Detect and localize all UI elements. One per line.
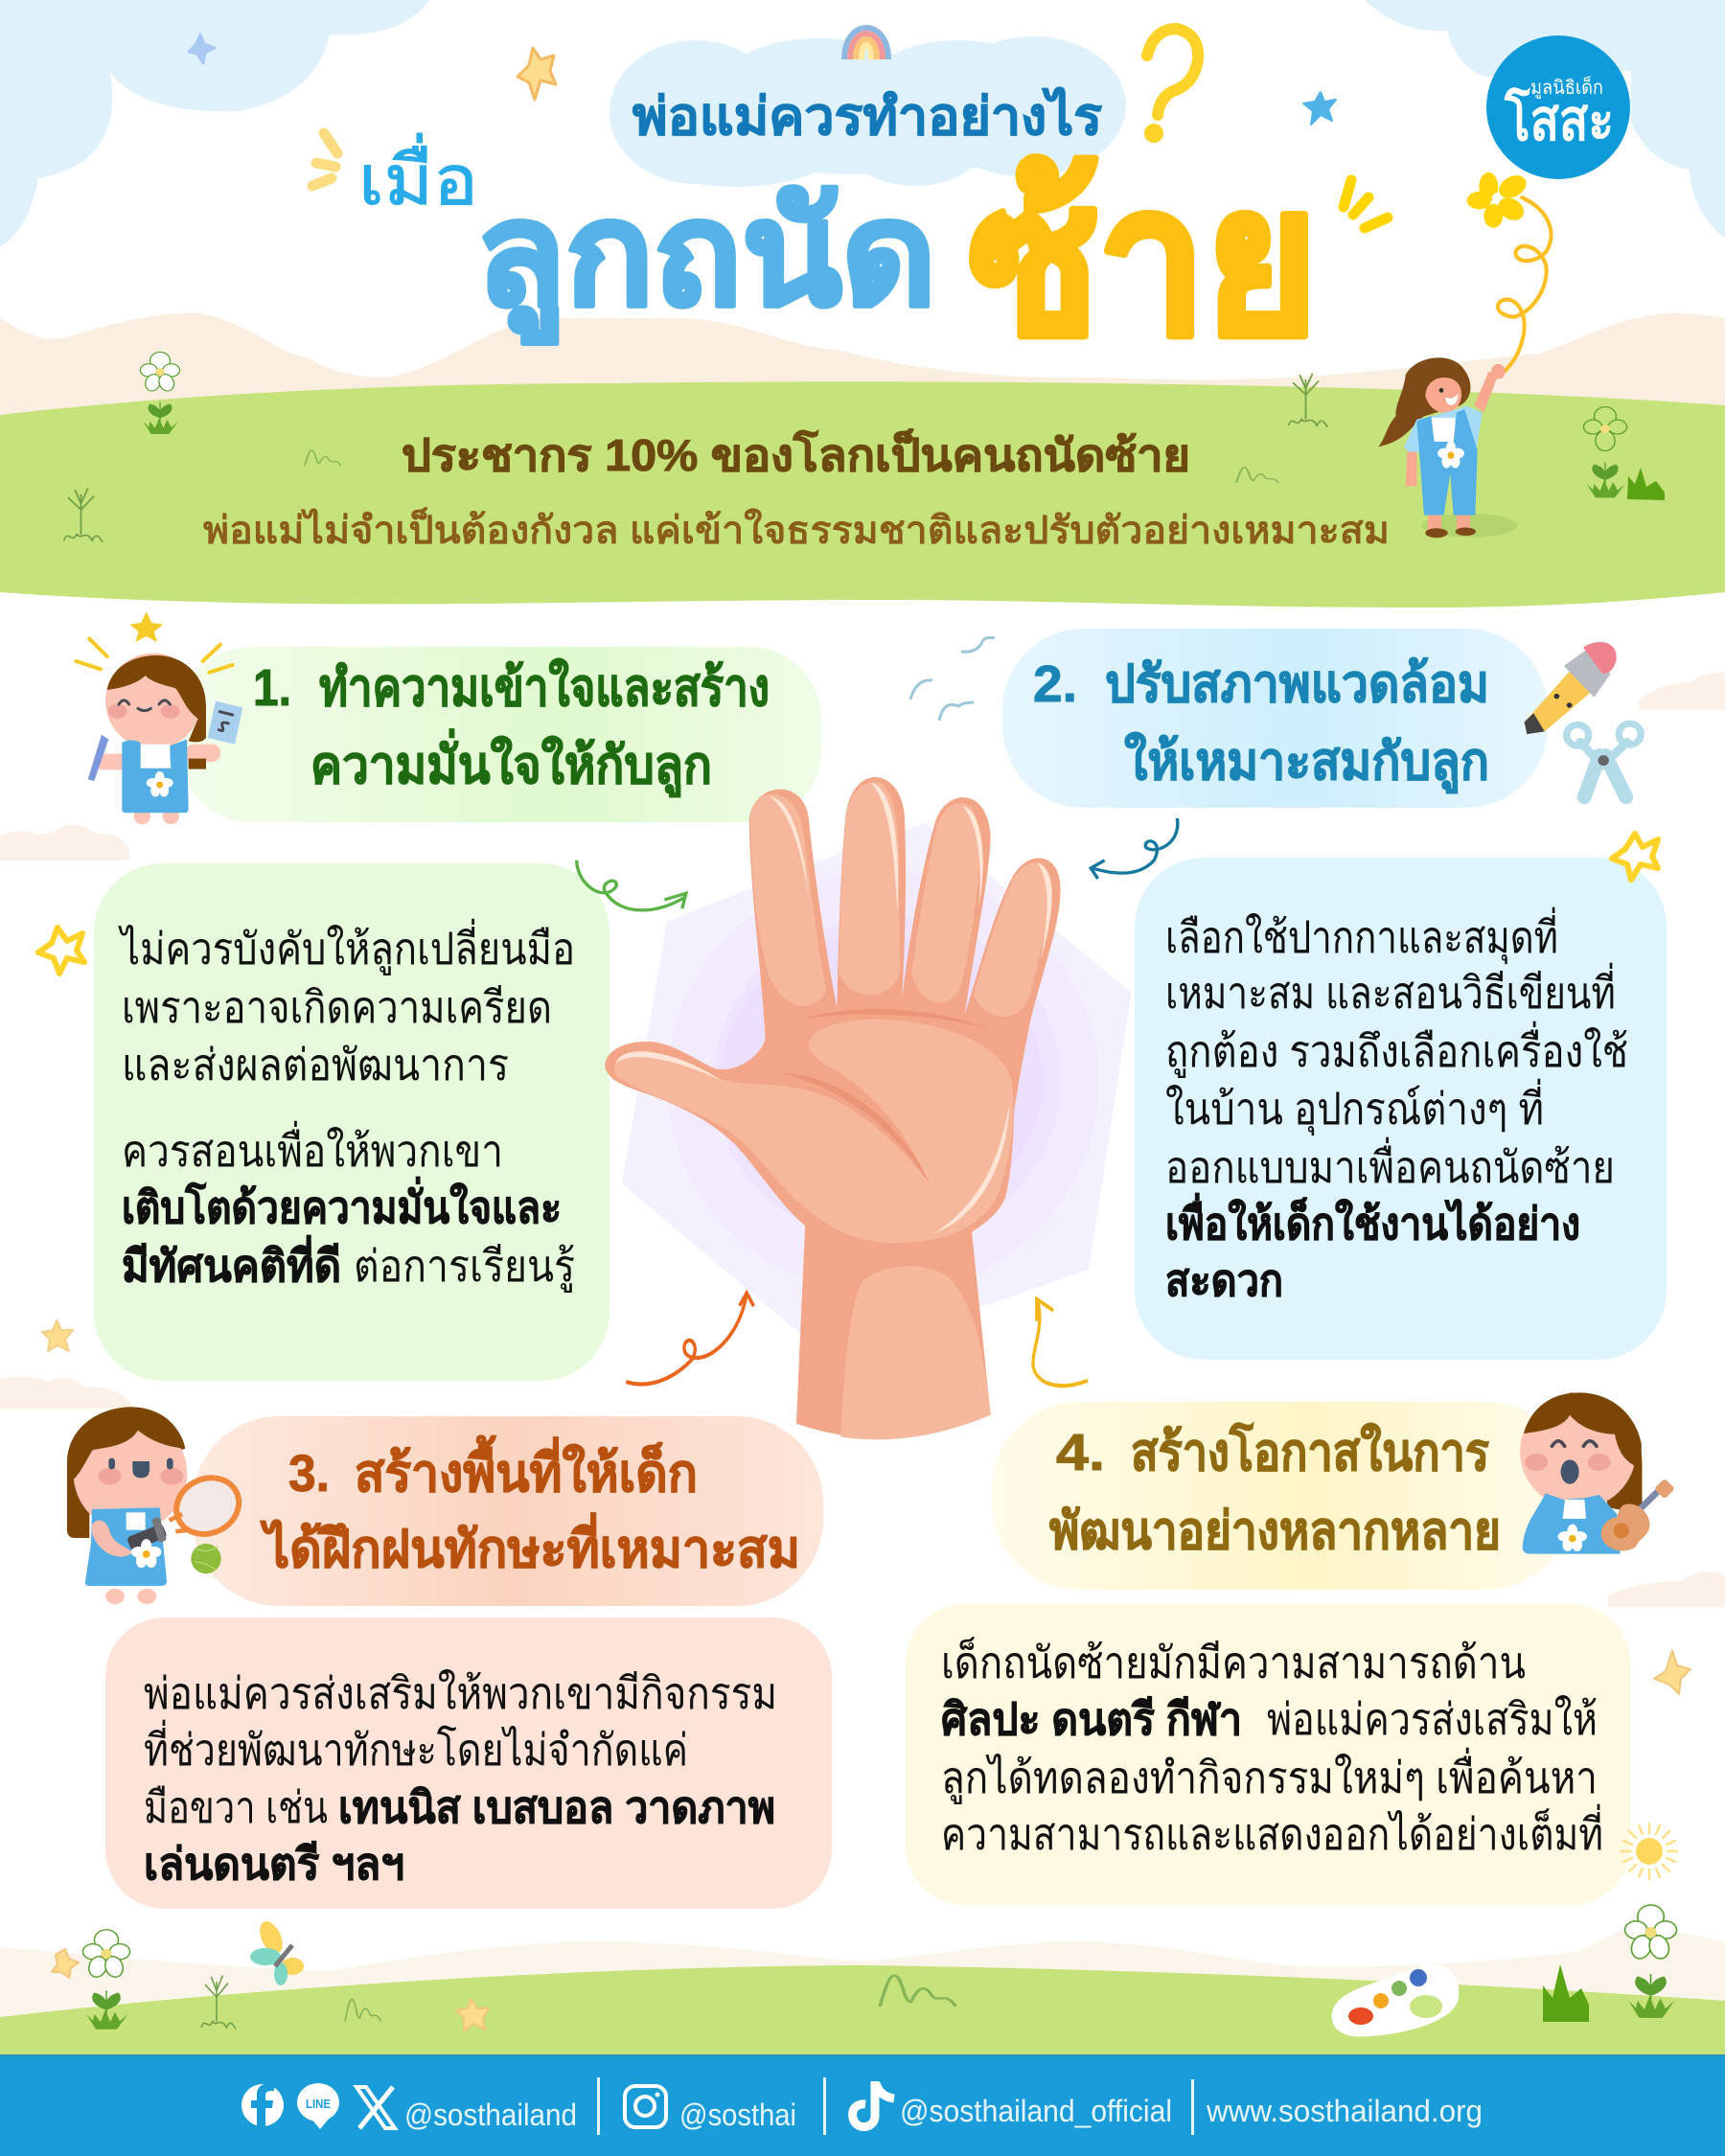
body text 3: เล่นดนตรี ฯลฯ — [144, 1839, 404, 1889]
body card 3 — [105, 1617, 832, 1909]
flower top right — [1583, 407, 1627, 497]
panel 3: practice space — [105, 1416, 832, 1909]
body card 2 — [1135, 858, 1667, 1360]
body text 2: เลือกใช้ปากกาและสมุดที่ — [1165, 906, 1558, 965]
heading text 4: 4. — [1056, 1424, 1105, 1481]
body text 1: ควรสอนเพื่อให้พวกเขา — [122, 1120, 503, 1176]
heading text 1: 1. — [253, 659, 291, 717]
body text 2: เพื่อให้เด็กใช้งานได้อย่าง — [1165, 1193, 1580, 1249]
body text 1: ไม่ควรบังคับให้ลูกเปลี่ยนมือ — [118, 918, 575, 975]
icon: instagram — [625, 2086, 666, 2127]
kite girl illustration — [1378, 171, 1552, 538]
body text 1: เพราะอาจเกิดความเครียด — [122, 982, 552, 1032]
heading text 4: สร้างโอกาสในการ — [1131, 1422, 1489, 1481]
body text 2: ออกแบบมาเพื่อคนถนัดซ้าย — [1165, 1136, 1615, 1192]
heading text 2: ปรับสภาพแวดล้อม — [1105, 655, 1489, 713]
heading text 4: พัฒนาอย่างหลากหลาย — [1049, 1502, 1501, 1560]
panel 2: environment — [1002, 629, 1667, 1360]
sprig bottom — [201, 1976, 236, 2030]
logo: โสสะ — [1504, 86, 1614, 152]
bottom plants — [82, 1905, 1676, 2030]
icon: question mark — [1147, 29, 1198, 137]
heading text 1: ทำความเข้าใจและสร้าง — [319, 657, 770, 717]
body text 1: และส่งผลต่อพัฒนาการ — [122, 1040, 509, 1089]
yellow flower kite — [1467, 171, 1530, 228]
sparks left of title — [312, 133, 337, 186]
icon: line — [297, 2083, 339, 2129]
icon: paint palette — [1332, 1964, 1459, 2036]
icon: tiktok — [853, 2081, 894, 2127]
top left cloud — [0, 0, 429, 247]
ground shadow — [1421, 514, 1517, 538]
icon: birds — [910, 637, 995, 721]
icon: line: LINE — [306, 2097, 331, 2111]
summary text line 2: พ่อแม่ไม่จำเป็นต้องกังวล แค่เข้าใจธรรมชาติและปรับตัวอย่างเหมาะสม — [203, 506, 1390, 552]
icon: sun — [1622, 1823, 1677, 1879]
heading text 2 — [1033, 655, 1489, 793]
heading pill 2 — [1002, 629, 1548, 808]
star: pale blue top left — [189, 34, 215, 63]
title: left: ซ้าย — [969, 146, 1318, 377]
panel 1: understanding — [94, 647, 821, 1381]
icon: facebook — [242, 2083, 284, 2126]
heading text 3: 3. — [288, 1445, 330, 1502]
footer bar — [0, 2054, 1725, 2156]
grass scribbles — [305, 450, 340, 466]
title: child favours: ลูกถนัด — [476, 173, 936, 344]
handle: sosthai: @sosthai — [679, 2098, 796, 2132]
flower top left — [140, 352, 180, 434]
grass bottom right — [1543, 1964, 1589, 2022]
heading text 3: สร้างพื้นที่ให้เด็ก — [355, 1435, 698, 1502]
tan hills — [0, 313, 1725, 450]
body text 4 — [941, 1637, 1603, 1859]
body text 2: ถูกต้อง รวมถึงเลือกเครื่องใช้ — [1165, 1021, 1628, 1078]
heading pill 4 — [992, 1402, 1572, 1590]
green meadow band — [0, 381, 1725, 608]
arrow: yellow to hand — [1033, 1299, 1088, 1386]
star: blue top right — [1303, 92, 1336, 125]
website: www.sosthailand.org — [1206, 2094, 1483, 2128]
body text 4: ลูกได้ทดลองทำกิจกรรมใหม่ๆ เพื่อค้นหา — [941, 1747, 1598, 1804]
stars around panels — [38, 834, 1690, 2031]
heading text 2: ให้เหมาะสมกับลูก — [1124, 731, 1489, 793]
palm creases — [782, 1009, 991, 1183]
body text 2: ในบ้าน อุปกรณ์ต่างๆ ที่ — [1165, 1078, 1544, 1136]
character 4: singing girl with ukulele — [1520, 1392, 1675, 1554]
flower bottom right — [1625, 1905, 1676, 2018]
handle: tiktok: @sosthailand_official — [900, 2094, 1172, 2128]
heading pill 3 — [193, 1416, 823, 1606]
finger pads and palm — [614, 782, 1049, 1439]
highlights — [616, 783, 1052, 1233]
purple hexagon backdrop behind hand — [622, 823, 1132, 1334]
logo: มูลนิธิเด็ก — [1530, 75, 1603, 100]
heading text 3: ได้ฝึกฝนทักษะที่เหมาะสม — [260, 1512, 800, 1578]
body text 2 — [1165, 906, 1628, 1305]
body text 3 — [144, 1668, 777, 1889]
bottom green meadow — [0, 1965, 1725, 2056]
body text 1: ต่อการเรียนรู้ — [354, 1241, 575, 1293]
body text 4: ศิลปะ ดนตรี กีฬา — [941, 1694, 1242, 1744]
arrow: blue to hand — [1091, 818, 1178, 879]
body text 3: มือขวา เช่น — [144, 1782, 328, 1832]
bottom tan hills — [0, 1927, 1725, 2054]
character 3: girl with tennis racket — [67, 1407, 248, 1604]
sprigs — [63, 489, 103, 542]
title: when: เมื่อ — [358, 133, 478, 219]
body text 3: พ่อแม่ควรส่งเสริมให้พวกเขามีกิจกรรม — [144, 1668, 777, 1718]
icon: rainbow — [844, 28, 888, 59]
heading text 2: 2. — [1033, 655, 1077, 713]
heading text 4 — [1049, 1422, 1501, 1560]
title: question line: พ่อแม่ควรทำอย่างไร — [632, 86, 1102, 146]
summary text line 1: ประชากร 10% ของโลกเป็นคนถนัดซ้าย — [402, 428, 1190, 480]
hand outline — [605, 777, 1061, 1438]
body card 1 — [94, 863, 610, 1381]
flower bottom left — [82, 1930, 130, 2030]
icon: x — [356, 2087, 395, 2128]
arrow: green to hand — [577, 860, 686, 910]
grass scribble bottom — [345, 2000, 380, 2022]
icon: scissors — [1567, 723, 1641, 797]
body text 1: มีทัศนคติที่ดี — [122, 1235, 341, 1291]
panel 4: opportunities — [906, 1402, 1630, 1905]
body text 4: พ่อแม่ควรส่งเสริมให้ — [1267, 1694, 1598, 1744]
heading text 1: ความมั่นใจให้กับลูก — [310, 728, 712, 797]
small tan clouds — [0, 673, 1725, 1607]
hand illustration — [605, 777, 1061, 1439]
body text 3: เทนนิส เบสบอล วาดภาพ — [338, 1782, 775, 1832]
body text 1: เติบโตด้วยความมั่นใจและ — [122, 1177, 562, 1232]
star: cream top — [518, 48, 556, 100]
top right cloud — [1365, 0, 1725, 239]
body card 4 — [906, 1604, 1630, 1905]
girl — [1378, 357, 1506, 538]
arrow: orange to hand — [626, 1293, 753, 1385]
heading pill 1 — [179, 647, 821, 822]
sparks right of title — [1344, 180, 1388, 228]
icon: pencil — [1525, 642, 1617, 734]
meadow plants top — [63, 352, 1665, 542]
kite string — [1498, 197, 1552, 372]
handle: sosthailand: @sosthailand — [404, 2098, 577, 2132]
icon: butterfly — [250, 1917, 304, 1985]
body text 2: เหมาะสม และสอนวิธีเขียนที่ — [1165, 962, 1616, 1018]
title cloud — [610, 36, 1126, 187]
body text 3: ที่ช่วยพัฒนาทักษะโดยไม่จำกัดแค่ — [144, 1719, 688, 1775]
grass top right — [1627, 468, 1665, 500]
logo — [1486, 35, 1630, 179]
body text 4: เด็กถนัดซ้ายมักมีความสามารถด้าน — [941, 1637, 1526, 1687]
body text 1 — [118, 918, 575, 1293]
body text 4: ความสามารถและแสดงออกได้อย่างเต็มที่ — [941, 1803, 1603, 1859]
heading text 3 — [260, 1435, 800, 1578]
heading text 1 — [253, 657, 770, 797]
body text 2: สะดวก — [1165, 1255, 1283, 1305]
character 1: girl with pen and card — [76, 611, 242, 824]
